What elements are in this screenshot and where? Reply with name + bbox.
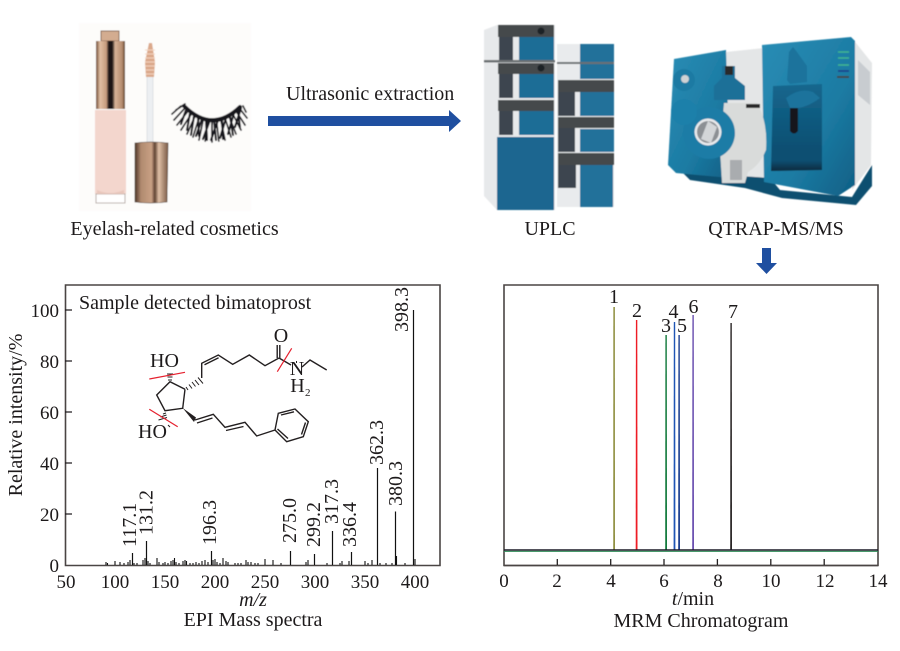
icon: false eyelash: [172, 104, 247, 142]
peak labels: 317.3: [321, 479, 343, 524]
left module stack: [484, 25, 555, 210]
peak labels: 196.3: [199, 500, 221, 545]
peak numbers: 3: [661, 315, 671, 337]
peak numbers: 6: [688, 296, 698, 318]
right module stack: [557, 44, 614, 207]
x axis title: t/min: [672, 588, 714, 610]
x axis numbers: 50: [56, 572, 76, 593]
y axis numbers: [30, 301, 59, 577]
x axis numbers: 200: [201, 572, 229, 593]
status lights: [838, 52, 849, 65]
peak labels: 380.3: [385, 461, 407, 506]
front door: [771, 84, 822, 171]
x axis numbers: 4: [606, 571, 616, 592]
x axis numbers: 10: [762, 571, 780, 592]
y axis title: Relative intensity/%: [5, 334, 27, 496]
peak numbers: 7: [728, 301, 738, 323]
peak 4: [674, 322, 675, 550]
peak numbers: 1: [609, 286, 619, 308]
x axis numbers: 12: [816, 571, 834, 592]
peak labels: 131.2: [136, 490, 158, 535]
peak 5: [678, 335, 680, 550]
chemical structure: bimatoprost: H: [290, 375, 305, 397]
arrow: QTRAP to chromatogram: [756, 248, 777, 274]
baseline: [504, 550, 878, 551]
peak numbers: 5: [677, 315, 687, 337]
peak labels: 398.3: [391, 287, 413, 332]
grey source housing: [720, 103, 766, 183]
x axis numbers: 8: [713, 571, 723, 592]
chemical structure: bimatoprost: 2: [305, 387, 310, 399]
label: Eyelash-related cosmetics: Eyelash-related cosmetics: [70, 218, 279, 240]
y axis ticks: [65, 310, 72, 514]
x axis numbers: 2: [552, 571, 562, 592]
chemical structure: bimatoprost: O: [274, 325, 288, 347]
y axis numbers: 60: [40, 403, 59, 424]
major peaks: [132, 310, 414, 565]
image: UPLC instrument: [484, 25, 614, 210]
peak 7: [730, 323, 732, 550]
x axis numbers: 14: [868, 571, 888, 592]
arrow: extraction to UPLC: [268, 110, 461, 132]
left blue panel: [668, 50, 730, 178]
chart: EPI mass spectrum: [5, 285, 440, 631]
source ring and window: [683, 107, 735, 159]
peak labels: 336.4: [339, 502, 361, 547]
x axis numbers: 0: [499, 571, 509, 592]
label: Ultrasonic extraction: Ultrasonic extraction: [286, 83, 454, 105]
x axis numbers: 100: [101, 572, 129, 593]
peak labels: 299.2: [303, 502, 325, 547]
image: eyelash-related cosmetics: [79, 23, 251, 211]
x axis numbers: [499, 571, 888, 592]
peak 3: [665, 335, 667, 550]
x axis title: m/z: [239, 589, 267, 611]
y axis numbers: 40: [40, 454, 59, 475]
x axis numbers: 400: [401, 572, 429, 593]
side vent on white panel: [858, 60, 870, 105]
image: QTRAP mass spectrometer: [668, 37, 872, 205]
plot frame: [504, 285, 878, 566]
y axis numbers: 100: [30, 301, 59, 322]
x axis numbers: [56, 572, 429, 593]
chemical structure: bimatoprost: HO: [138, 421, 167, 443]
x axis numbers: 350: [351, 572, 379, 593]
icon: mascara wand: [135, 43, 168, 203]
label: UPLC: UPLC: [524, 218, 576, 240]
peak numbers: 2: [632, 300, 642, 322]
peak labels: 362.3: [366, 420, 388, 465]
peak numbers: [609, 286, 738, 337]
ion source tower: [714, 66, 745, 100]
label: QTRAP-MS/MS: QTRAP-MS/MS: [708, 218, 844, 240]
peak labels: 117.1: [119, 503, 141, 547]
chemical structure: bimatoprost: N: [290, 358, 304, 380]
minor peaks: [106, 556, 415, 565]
y axis numbers: 80: [40, 352, 59, 373]
caption: MRM Chromatogram: MRM Chromatogram: [614, 610, 789, 632]
plot frame: [66, 285, 440, 566]
peak 2: [636, 320, 638, 550]
y axis numbers: 0: [50, 556, 59, 577]
peak numbers: 4: [668, 301, 678, 323]
peak labels: 275.0: [279, 498, 301, 543]
x axis numbers: 250: [251, 572, 279, 593]
base: [682, 165, 872, 205]
right blue panel: [762, 37, 855, 196]
chart note: Sample detected bimatoprost: [79, 292, 312, 314]
y axis numbers: 20: [40, 505, 59, 526]
peak 6: [692, 315, 694, 550]
white chassis: [726, 38, 872, 190]
chemical structure: bimatoprost: HO: [150, 350, 179, 372]
chart: MRM chromatogram: [499, 285, 888, 632]
chemical structure: bimatoprost: [138, 325, 327, 443]
x axis numbers: 150: [151, 572, 179, 593]
peak 1: [613, 307, 615, 550]
door handle: [786, 47, 820, 108]
x axis numbers: 300: [301, 572, 329, 593]
peak labels: [119, 287, 413, 547]
x axis ticks: [557, 559, 824, 565]
left knobs: [673, 69, 695, 91]
icon: mascara tube: [95, 31, 126, 203]
caption: EPI Mass spectra: EPI Mass spectra: [184, 609, 323, 631]
x axis numbers: 6: [659, 571, 669, 592]
